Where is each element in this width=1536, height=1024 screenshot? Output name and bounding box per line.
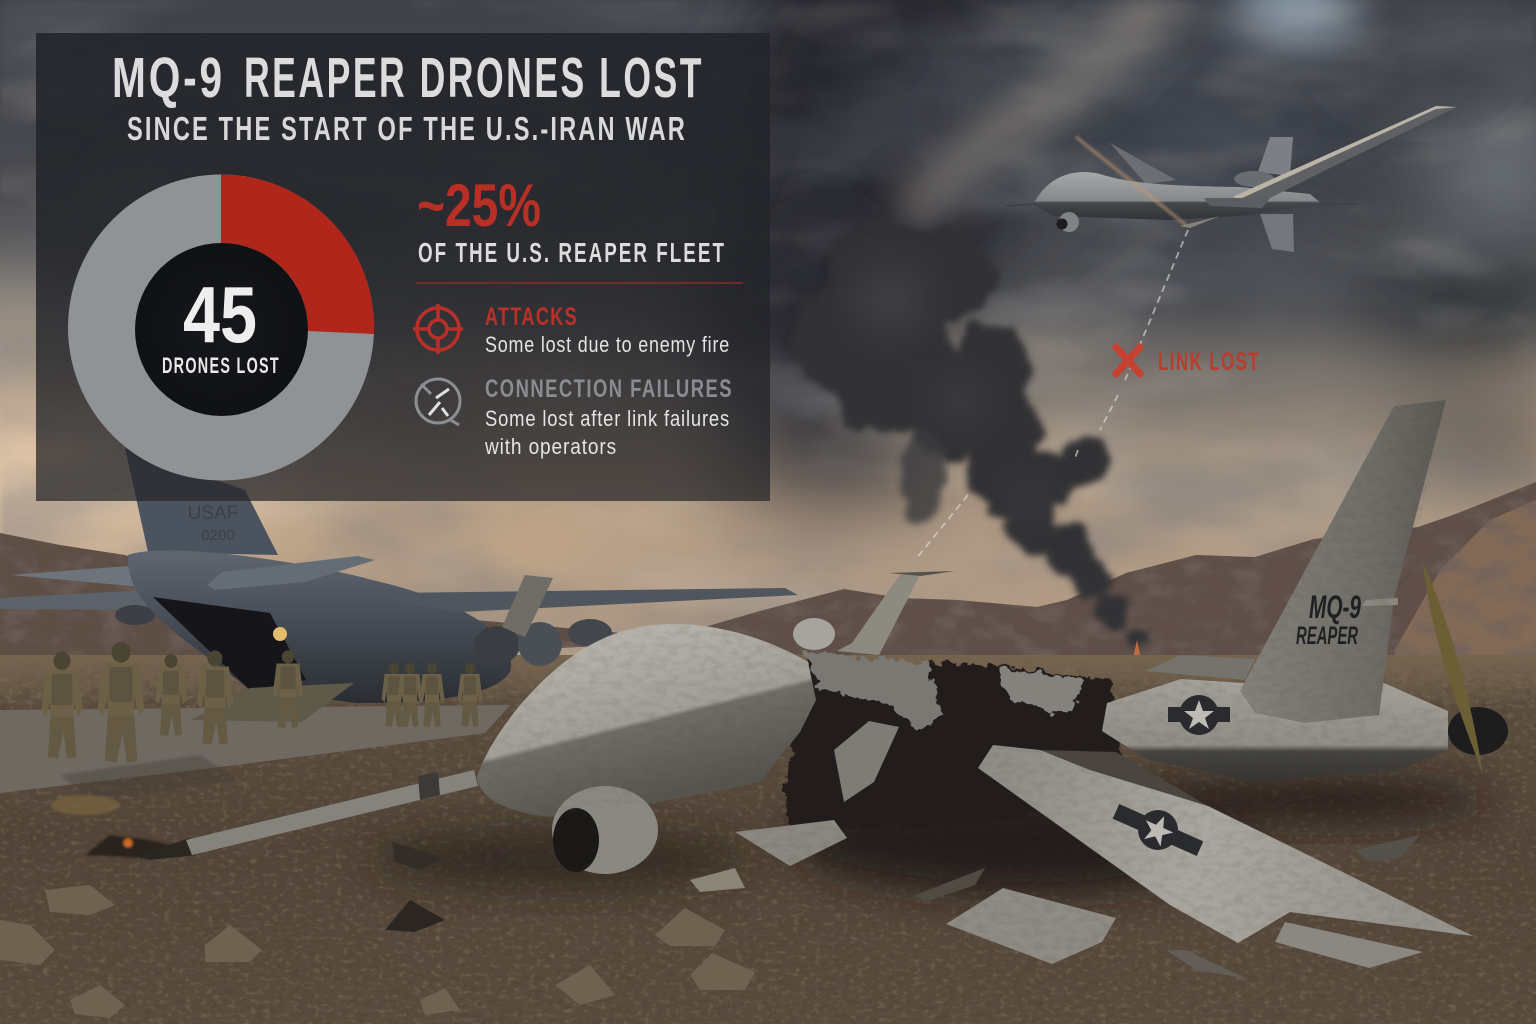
cargo plane: USAF — [188, 503, 238, 524]
attacks description: Some lost due to enemy fire — [485, 332, 730, 357]
icon: broken link — [416, 379, 460, 425]
smoke plume — [795, 220, 1147, 663]
percentage stat: ~25% — [417, 172, 541, 239]
background: stormy sky — [0, 0, 1536, 700]
crashed drone wreck — [135, 400, 1508, 978]
link lost label — [1114, 345, 1260, 376]
cargo plane — [0, 448, 798, 722]
tail marking — [1296, 589, 1361, 650]
tail marking: MQ-9 — [1309, 589, 1361, 625]
roundel on fuselage — [1168, 695, 1230, 735]
connection failures description: Some lost after link failures — [485, 406, 730, 431]
info panel — [36, 33, 770, 501]
subtitle: SINCE THE START OF THE U.S.-IRAN WAR — [127, 110, 687, 147]
connection failures description: with operators — [484, 434, 617, 459]
rocks and debris — [0, 835, 1420, 1018]
tail marking: REAPER — [1296, 622, 1358, 650]
distant mountains — [0, 482, 1536, 655]
title — [112, 46, 704, 110]
attacks heading: ATTACKS — [485, 303, 578, 331]
cargo plane: 0200 — [201, 527, 235, 544]
link lost dashed signal line — [915, 230, 1188, 560]
soldiers — [41, 642, 482, 762]
donut value: 45 — [183, 270, 257, 359]
roundel on wing — [1108, 793, 1208, 867]
flying MQ-9 Reaper drone — [1005, 106, 1457, 252]
donut caption: DRONES LOST — [162, 353, 280, 378]
link lost label: LINK LOST — [1158, 348, 1260, 376]
connection failures heading: CONNECTION FAILURES — [485, 375, 733, 403]
title: MQ-9 — [112, 46, 225, 110]
title: REAPER DRONES LOST — [244, 46, 704, 110]
icon: crosshair — [413, 304, 463, 354]
ground — [0, 655, 1536, 1024]
connection failures description — [484, 406, 730, 459]
donut chart: 25% of fleet lost — [68, 174, 374, 480]
fleet caption: OF THE U.S. REAPER FLEET — [418, 237, 726, 268]
